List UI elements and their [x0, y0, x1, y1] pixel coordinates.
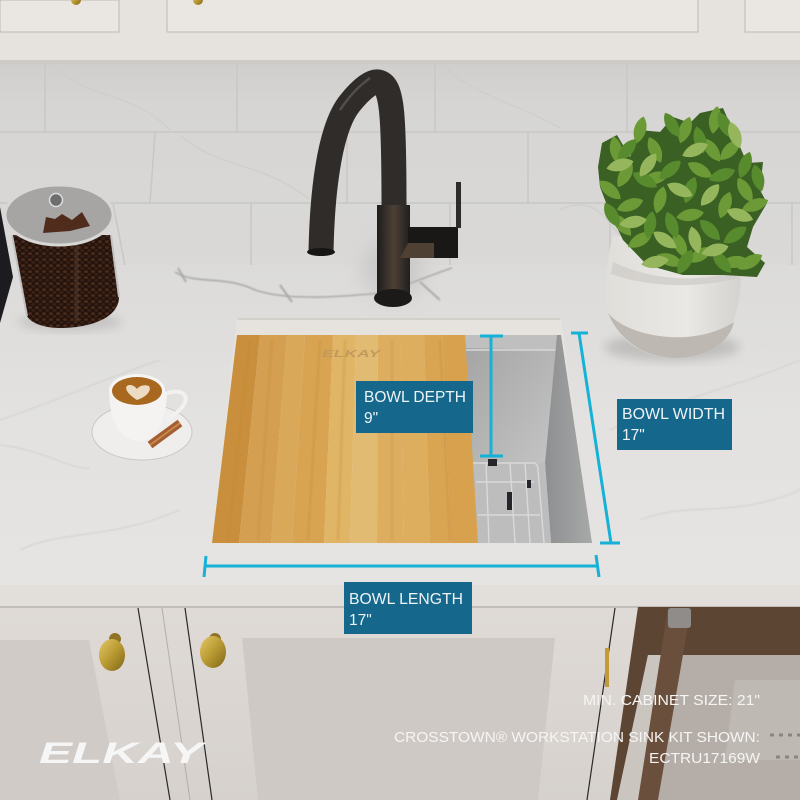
cutting board brand mark: ELKAY — [322, 349, 382, 360]
icon: left cabinet knob — [99, 633, 125, 671]
backsplash tiles — [0, 62, 800, 268]
callout: bowl depth — [356, 381, 473, 433]
callout: bowl width — [617, 399, 732, 450]
icon: coffee cup and saucer — [92, 374, 192, 460]
plant foliage — [595, 105, 770, 277]
icon: right cabinet knob — [200, 633, 226, 668]
dimension arrow: bowl width — [571, 333, 620, 543]
text: minimum cabinet size: MIN. CABINET SIZE: 21" — [583, 692, 760, 709]
callout: bowl length: 17" — [349, 612, 372, 629]
callout: bowl depth: 9" — [364, 410, 378, 427]
upper cabinets — [0, 0, 800, 64]
callout: bowl width: BOWL WIDTH — [622, 406, 725, 423]
icon: potted plant — [595, 105, 770, 361]
text: product line: CROSSTOWN® WORKSTATION SINK KIT SHOWN: — [394, 729, 760, 746]
dimension arrow: bowl length — [204, 555, 599, 577]
text: model number: ECTRU17169W — [649, 750, 761, 767]
plant pot — [606, 235, 741, 358]
sink cutout ledge — [210, 318, 592, 545]
callout: bowl length — [344, 582, 472, 634]
callout: bowl length: BOWL LENGTH — [349, 591, 463, 608]
countertop — [0, 265, 800, 608]
callout: bowl width: 17" — [622, 427, 645, 444]
logo: Elkay: ELKAY — [39, 737, 208, 770]
wine fridge — [610, 607, 800, 800]
icon: faucet — [307, 78, 461, 307]
callout: bowl depth: BOWL DEPTH — [364, 389, 466, 406]
sink — [210, 318, 592, 545]
icon: door hinge — [605, 648, 609, 687]
lower cabinets — [0, 608, 800, 800]
icon: coffee bean jar — [0, 185, 122, 331]
dimension arrow: bowl depth — [480, 336, 503, 456]
steel bowl — [465, 335, 592, 543]
cutting board — [212, 335, 478, 543]
